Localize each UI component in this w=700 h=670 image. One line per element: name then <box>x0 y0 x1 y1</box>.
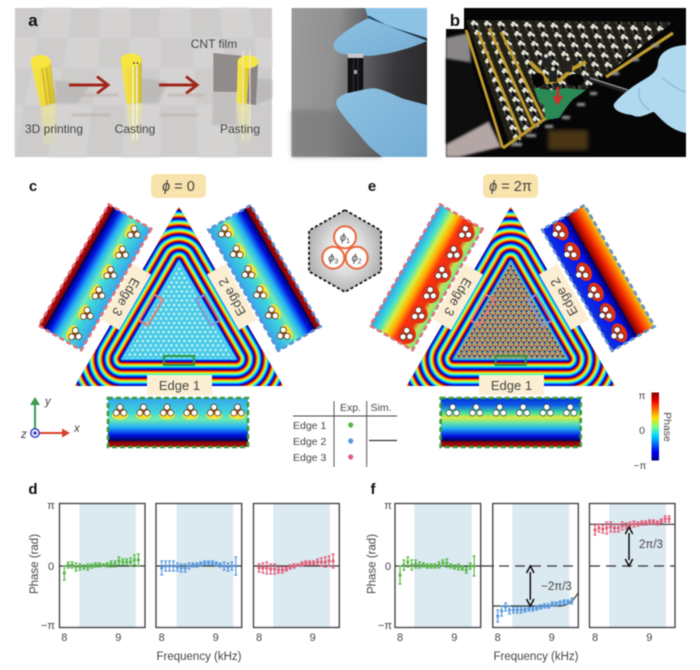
chart d3: edge 3: 9 <box>310 632 316 644</box>
panel letter f: f <box>370 481 376 498</box>
coordinate axes: z <box>20 429 27 441</box>
panel letter c: c <box>29 178 37 195</box>
edge 1 marker <box>496 356 526 365</box>
faint arrow reflections <box>72 95 204 115</box>
y axis d: −π <box>41 620 55 632</box>
label: Edge 2 (left) <box>207 264 257 330</box>
arrow: minus 2 pi over 3 <box>526 566 534 606</box>
chart d1: edge 1: 8 <box>61 632 67 644</box>
colour bar: phase: −π <box>634 461 646 472</box>
green replacement piece <box>534 88 586 120</box>
yellow lattice frames <box>466 28 673 148</box>
site phi 3: ϕ <box>328 252 334 264</box>
arrow: step two <box>159 76 197 94</box>
strip: edge 3, phi = 0 <box>39 204 151 350</box>
strip: edge 2, phi = 2 pi <box>542 205 655 351</box>
colour bar: phase <box>634 391 673 472</box>
chart f2: edge 2: 8 <box>495 632 501 644</box>
coordinate axes: y <box>44 396 52 408</box>
label: Pasting: Pasting <box>220 122 260 136</box>
panel letter d: d <box>28 481 38 498</box>
y axis d <box>29 500 55 632</box>
chart f2: edge 2 <box>493 504 578 644</box>
lattice interior <box>454 261 568 359</box>
chart f1: edge 1: 8 <box>397 632 403 644</box>
label: Edge 3 (right): Edge 3 <box>441 275 475 319</box>
label: Edge 3 (left) <box>101 264 151 330</box>
concentric phase rings <box>454 261 568 359</box>
chart d2: edge 2 <box>156 504 242 644</box>
triangle sample: phi = 2 pi phase map <box>454 261 568 365</box>
chart f3: edge 3 <box>590 504 675 644</box>
chart f2: edge 2: 9 <box>549 632 555 644</box>
chart f3: edge 3: 9 <box>646 632 652 644</box>
chart f1: edge 1: 9 <box>451 632 457 644</box>
label: Casting: Casting <box>115 122 155 136</box>
coordinate axes: x <box>73 423 81 435</box>
edge 2 marker <box>528 295 552 325</box>
x axis label f: Frequency (kHz) <box>494 651 579 663</box>
open cavity shadows <box>532 73 584 87</box>
label: Edge 1 (right) <box>479 375 544 395</box>
edge 1 marker <box>164 356 194 365</box>
strip: edge 2, phi = 0 <box>208 205 321 351</box>
heading: phi = 2 pi: ϕ = 2π <box>489 179 532 195</box>
y axis f: π <box>384 500 392 512</box>
site phi 1: 1 <box>346 238 350 245</box>
panel letter a: a <box>28 11 38 30</box>
lattice interior <box>122 261 236 359</box>
colour bar: phase: 0 <box>639 425 645 437</box>
edge 3 marker <box>139 295 163 325</box>
legend table: Exp. <box>340 402 361 414</box>
y axis f: −π <box>378 620 392 632</box>
label: Edge 1 (right): Edge 1 <box>491 378 532 393</box>
label: 3D printing: 3D printing <box>25 122 83 136</box>
gloved hand <box>614 45 686 133</box>
upper glove finger <box>334 18 427 56</box>
label: Edge 1 (left) <box>147 375 212 395</box>
arrow: step one <box>69 76 108 94</box>
y axis f: 0 <box>385 561 391 573</box>
legend table <box>293 401 397 467</box>
bottom row pillar sides <box>512 44 659 146</box>
tweezers <box>584 77 628 92</box>
label: Edge 2 (right) <box>539 264 589 330</box>
site phi 3: 3 <box>334 258 338 265</box>
label: Edge 2 (left): Edge 2 <box>215 275 249 319</box>
black cylinder <box>348 54 363 94</box>
strip: edge 1, phi = 2 pi <box>441 398 581 447</box>
legend table: Sim. <box>370 402 392 414</box>
y axis f <box>366 500 392 632</box>
coordinate axes <box>20 396 81 441</box>
cast shadows <box>55 78 272 105</box>
heading: phi = 0 <box>151 174 206 198</box>
site phi 2 <box>346 247 368 269</box>
panel letter e: e <box>368 178 376 195</box>
triangle sample: phi = 0 phase map <box>122 261 236 365</box>
upper glove back <box>365 8 427 38</box>
central pillars <box>542 54 572 82</box>
label: Edge 2 (right): Edge 2 <box>547 275 581 319</box>
y axis d: 0 <box>48 561 54 573</box>
x axis label d: Frequency (kHz) <box>156 651 242 663</box>
label: Edge 3 (right) <box>433 264 483 330</box>
unit cell hexagon <box>309 210 381 292</box>
heading: phi = 2 pi <box>483 174 538 198</box>
label: minus 2 pi over 3: −2π/3 <box>541 581 572 593</box>
edge 3 marker <box>471 295 495 325</box>
chart d1: edge 1: 9 <box>115 632 121 644</box>
strip: edge 3, phi = 2 pi <box>370 204 483 350</box>
site phi 2: ϕ <box>352 252 358 264</box>
y axis f: Phase (rad) <box>366 534 378 594</box>
site phi 2: 2 <box>358 258 362 265</box>
cylinder: pasting with CNT film <box>212 50 258 143</box>
gold reflection <box>548 130 588 150</box>
edge 2 marker <box>196 295 220 325</box>
legend table: Edge 2 <box>293 436 326 448</box>
chart d2: edge 2: 8 <box>159 632 165 644</box>
glove finger shadows <box>639 78 686 110</box>
dark glove fold <box>368 17 427 41</box>
colour bar: phase: π <box>639 391 646 402</box>
y axis d: Phase (rad) <box>29 534 41 594</box>
colour bar: phase: Phase <box>661 412 673 442</box>
label: 2 pi over 3: 2π/3 <box>639 539 663 551</box>
y axis d: π <box>47 500 55 512</box>
chart d3: edge 3 <box>254 504 339 644</box>
panel letter b <box>446 8 464 30</box>
chart d3: edge 3: 8 <box>256 632 262 644</box>
arrow: 2 pi over 3 <box>625 527 633 566</box>
site phi 1: ϕ <box>340 232 346 244</box>
chart d1: edge 1 <box>60 504 145 644</box>
legend table: Edge 3 <box>293 452 326 464</box>
photo: cylinder held by gloved fingers <box>292 8 427 157</box>
clear plastic corners <box>446 33 501 157</box>
chart f1: edge 1 <box>395 504 494 644</box>
panel b: assembled lattice photo <box>446 8 686 157</box>
concentric phase rings <box>122 261 236 359</box>
cylinder: 3D printing <box>31 55 56 145</box>
site phi 3 <box>322 247 344 269</box>
cylinder: casting <box>120 54 142 145</box>
red insertion arrow <box>554 87 562 103</box>
strip: edge 1, phi = 0 <box>108 398 248 447</box>
label: Edge 1 (left): Edge 1 <box>159 378 200 393</box>
label: Edge 3 (left): Edge 3 <box>109 275 143 319</box>
chart f3: edge 3: 8 <box>592 632 598 644</box>
site phi 1 <box>334 226 356 248</box>
lattice of pillars <box>466 20 673 148</box>
panel letter b: b <box>450 11 460 30</box>
heading: phi = 0: ϕ = 0 <box>162 179 195 195</box>
chart d2: edge 2: 9 <box>213 632 219 644</box>
panel a: fabrication steps <box>15 8 272 157</box>
legend table: Edge 1 <box>293 420 326 432</box>
label: CNT film: CNT film <box>191 37 237 51</box>
lower glove finger <box>336 88 427 157</box>
